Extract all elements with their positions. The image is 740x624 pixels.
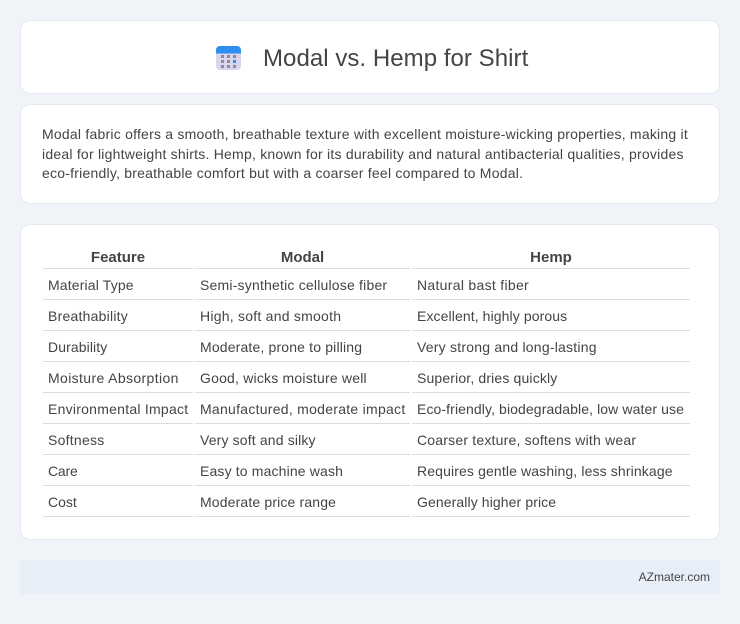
comparison table: Easy to machine wash (200, 463, 343, 479)
description text (42, 126, 688, 181)
footer bar (20, 560, 720, 594)
comparison table: Superior, dries quickly (417, 370, 557, 386)
comparison table: Moisture Absorption (48, 370, 179, 386)
description text: eco-friendly, breathable comfort but with a coarser feel compared to Modal. (42, 165, 523, 181)
description text: Modal fabric offers a smooth, breathable texture with excellent moisture-wicking properties, making it (42, 126, 688, 142)
comparison table: Environmental Impact (48, 401, 188, 417)
panel: comparison table (20, 224, 720, 540)
comparison table: Moderate, prone to pilling (200, 339, 362, 355)
column header: Hemp: Hemp (530, 249, 572, 266)
comparison table: Good, wicks moisture well (200, 370, 367, 386)
comparison table: Eco-friendly, biodegradable, low water use (417, 401, 684, 417)
comparison table: Softness (48, 432, 104, 448)
comparison table: Very strong and long-lasting (417, 339, 597, 355)
comparison table: Breathability (48, 308, 128, 324)
comparison table: Material Type (48, 277, 134, 293)
comparison table: Durability (48, 339, 107, 355)
comparison table: Very soft and silky (200, 432, 316, 448)
comparison table (43, 249, 690, 517)
header panel (20, 20, 720, 94)
panel: description (20, 104, 720, 204)
column header: Feature: Feature (91, 249, 145, 266)
comparison table: Natural bast fiber (417, 277, 529, 293)
comparison table: Semi-synthetic cellulose fiber (200, 277, 387, 293)
column header: Modal: Modal (281, 249, 324, 266)
description text: ideal for lightweight shirts. Hemp, known for its durability and natural antibacterial qualities, provides (42, 146, 684, 162)
comparison table: Generally higher price (417, 494, 556, 510)
title: Modal vs. Hemp for Shirt (263, 45, 528, 72)
comparison table: Cost (48, 494, 77, 510)
comparison table: Care (48, 463, 78, 479)
comparison table: High, soft and smooth (200, 308, 341, 324)
comparison table: Requires gentle washing, less shrinkage (417, 463, 673, 479)
icon: calendar (216, 46, 241, 70)
comparison table: Moderate price range (200, 494, 336, 510)
comparison table: Excellent, highly porous (417, 308, 567, 324)
comparison table: Manufactured, moderate impact (200, 401, 405, 417)
comparison table: Coarser texture, softens with wear (417, 432, 636, 448)
footer credit: AZmater.com (639, 570, 710, 584)
